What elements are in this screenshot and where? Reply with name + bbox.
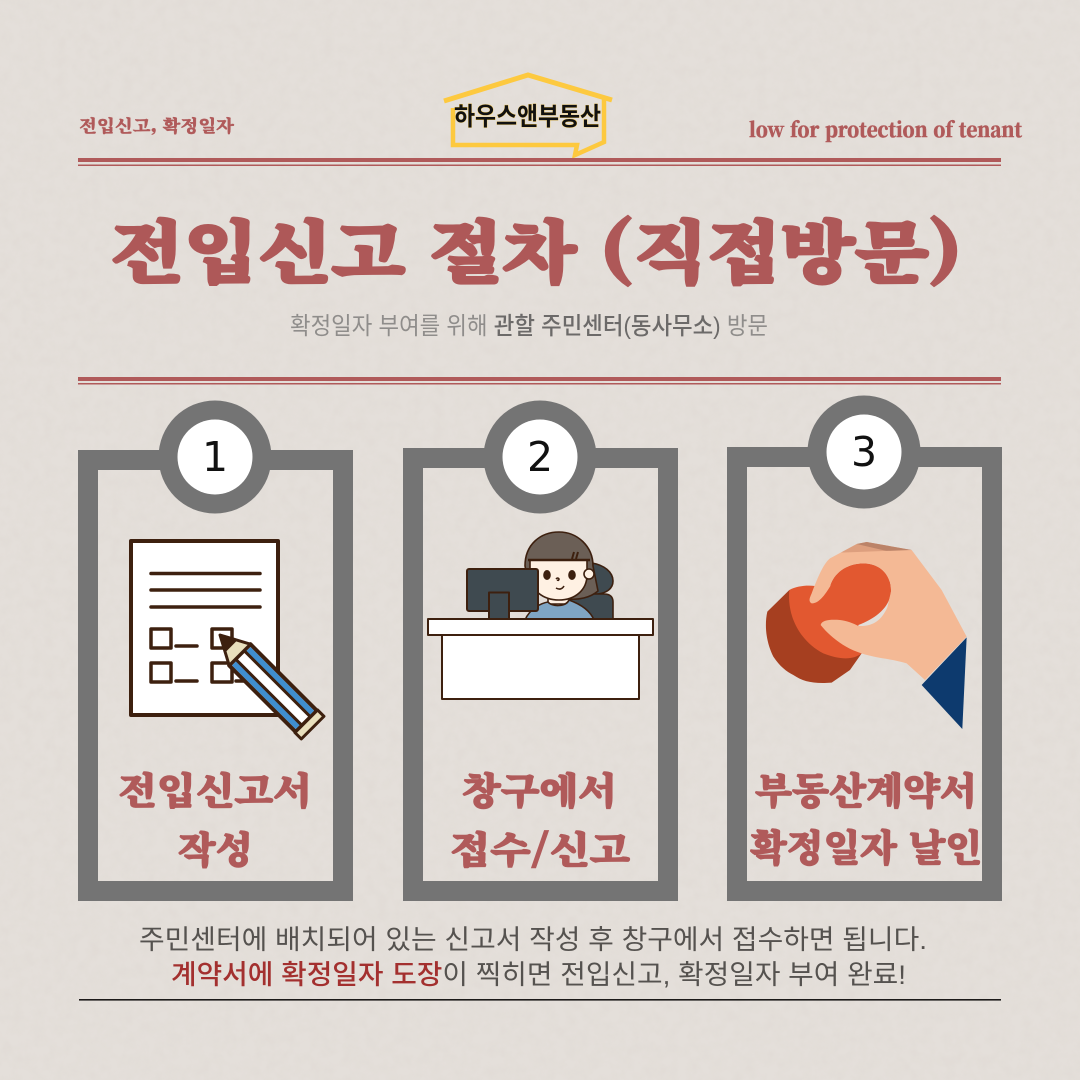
icon: clerk at desk [428, 532, 653, 699]
icon: form and pencil [131, 541, 324, 739]
panel 3: stamp the contract [737, 396, 992, 891]
logo roof [444, 75, 612, 101]
header left label: 전입신고, 확정일자 [79, 112, 235, 137]
icon: hand holding stamp [766, 542, 967, 729]
panel 3 frame [737, 457, 992, 891]
panel 1 caption: 전입신고서 [118, 761, 312, 815]
panel 2 caption: 창구에서 [462, 761, 617, 815]
footer text line 2: 계약서에 확정일자 도장 이 찍히면 전입신고, 확정일자 부여 완료! [171, 960, 906, 990]
header right label: low for protection of tenant [749, 114, 1023, 143]
panel 2 caption [450, 761, 630, 874]
logo walls and speech tail [453, 97, 604, 155]
panel 3 caption [750, 761, 982, 872]
logo: house speech bubble [444, 75, 612, 155]
step number 2: 2 [527, 433, 553, 481]
panel 2: submit at the counter [413, 400, 668, 891]
panel 3 caption: 확정일자 날인 [750, 818, 982, 872]
step number 1 [158, 400, 272, 514]
header double rule [78, 158, 1001, 166]
footer rule [79, 999, 1001, 1001]
logo text: 하우스앤부동산 [454, 103, 601, 131]
panel 1 caption [118, 761, 312, 874]
step number 3 [808, 396, 920, 508]
panel 2 caption: 접수/신고 [450, 820, 630, 874]
panel 1 caption: 작성 [178, 820, 253, 874]
subtitle: 확정일자 부여를 위해 관할 주민센터(동사무소) 방문 [290, 313, 768, 340]
title: 전입신고 절차 (직접방문) [110, 200, 962, 297]
step number 2 [484, 400, 596, 514]
panel 1: write the form [88, 400, 343, 891]
panel 1 frame [88, 460, 343, 891]
step number 1: 1 [202, 433, 228, 481]
panel 3 caption: 부동산계약서 [755, 761, 977, 815]
step number 3: 3 [851, 428, 877, 476]
footer text line 1: 주민센터에 배치되어 있는 신고서 작성 후 창구에서 접수하면 됩니다. [139, 925, 927, 955]
panel 2 frame [413, 458, 668, 891]
second double rule [78, 377, 1001, 384]
